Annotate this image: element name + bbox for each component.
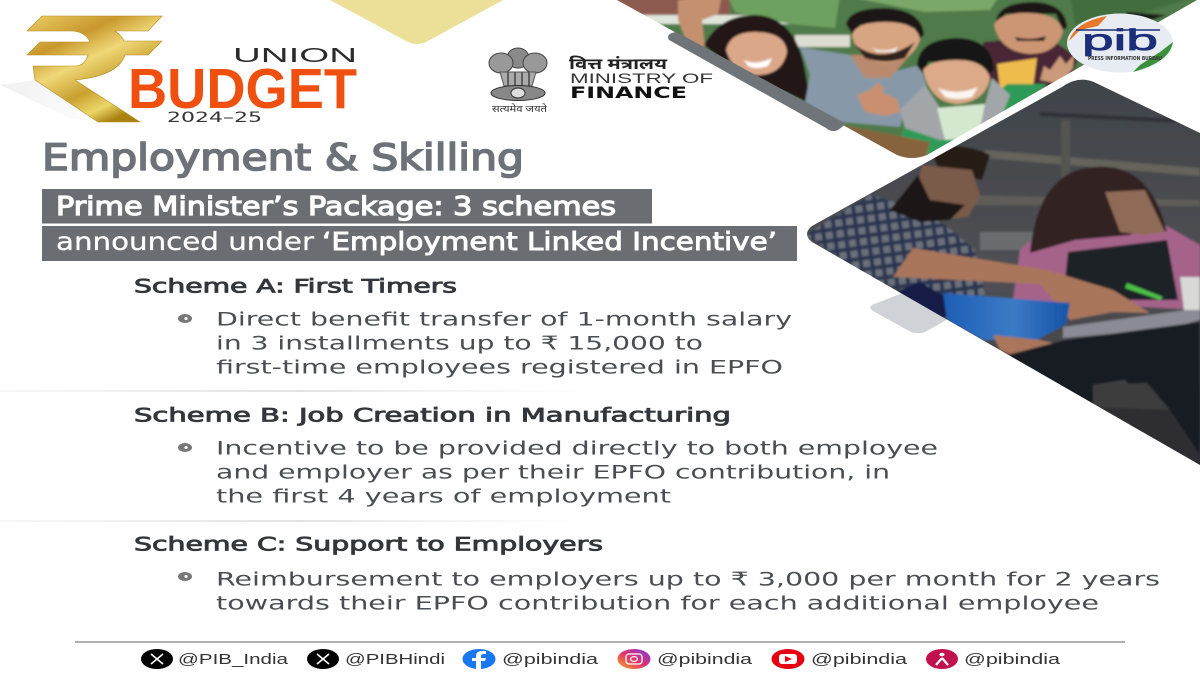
scheme a heading: Scheme A: First Timers (134, 276, 457, 298)
banner line 1: Prime Minister’s Package: 3 schemes (56, 192, 616, 222)
scheme a text: in 3 installments up to ₹ 15,000 to (216, 332, 703, 354)
bullet (178, 443, 192, 452)
icon: facebook (462, 649, 496, 669)
year: 2024–25 (167, 110, 262, 126)
logo: union budget (0, 16, 357, 126)
scheme b text: Incentive to be provided directly to both employee (216, 438, 938, 460)
scheme a text (216, 308, 792, 378)
handle: @PIB_India (178, 651, 289, 668)
banner line 1 (42, 189, 652, 224)
scheme a text: Direct benefit transfer of 1-month salary (216, 308, 792, 330)
scheme b text: the first 4 years of employment (216, 486, 671, 508)
pib logo: pib (1082, 24, 1158, 57)
photo: students smiling (600, 0, 1200, 165)
banner line 2: ‘Employment Linked Incentive’ (322, 227, 777, 256)
icon: youtube (772, 649, 804, 669)
icon: national emblem: सत्यमेव जयते (492, 103, 548, 116)
yellow triangle accent (330, 0, 503, 44)
handle: @pibindia (811, 651, 908, 668)
scheme b text (216, 438, 938, 508)
scheme a (134, 276, 792, 378)
gray accent bar (668, 32, 846, 131)
ministry of: MINISTRY OF (570, 70, 713, 86)
handle: @pibindia (657, 651, 753, 668)
scheme b (134, 406, 938, 508)
scheme c text: towards their EPFO contribution for each additional employee (216, 592, 1099, 614)
scheme c text (216, 568, 1160, 614)
scheme c (134, 534, 1160, 614)
social media footer (141, 649, 1061, 669)
pib logo: PRESS INFORMATION BUREAU (1088, 56, 1162, 62)
banner line 2: announced under (56, 227, 315, 256)
scheme c text: Reimbursement to employers up to ₹ 3,000 per month for 2 years (216, 568, 1160, 590)
ministry of finance logo (489, 48, 713, 116)
handle: @pibindia (964, 651, 1061, 668)
icon: koo (926, 649, 958, 669)
hindi name: वित्त मंत्रालय (569, 56, 668, 76)
scheme c heading: Scheme C: Support to Employers (134, 534, 603, 556)
icon: x (141, 649, 173, 669)
gray diamond accent (870, 292, 950, 333)
bullet (178, 314, 192, 323)
heading: Employment & Skilling (42, 136, 524, 179)
banner line 2 (42, 226, 797, 261)
icon: national emblem (489, 48, 548, 116)
icon: instagram (618, 649, 650, 669)
budget: BUDGET (128, 57, 357, 121)
handle: @PIBHindi (345, 651, 445, 668)
scheme a text: first-time employees registered in EPFO (216, 356, 783, 378)
icon: x (307, 649, 339, 669)
pib logo (1067, 14, 1173, 72)
union: UNION (233, 45, 357, 67)
handle: @pibindia (502, 651, 599, 668)
scheme b text: and employer as per their EPFO contribution, in (216, 462, 890, 484)
bullet (178, 572, 192, 581)
finance: FINANCE (570, 83, 687, 102)
photo: students studying (800, 70, 1200, 480)
icon: golden rupee (27, 16, 162, 122)
scheme b heading: Scheme B: Job Creation in Manufacturing (134, 406, 731, 426)
